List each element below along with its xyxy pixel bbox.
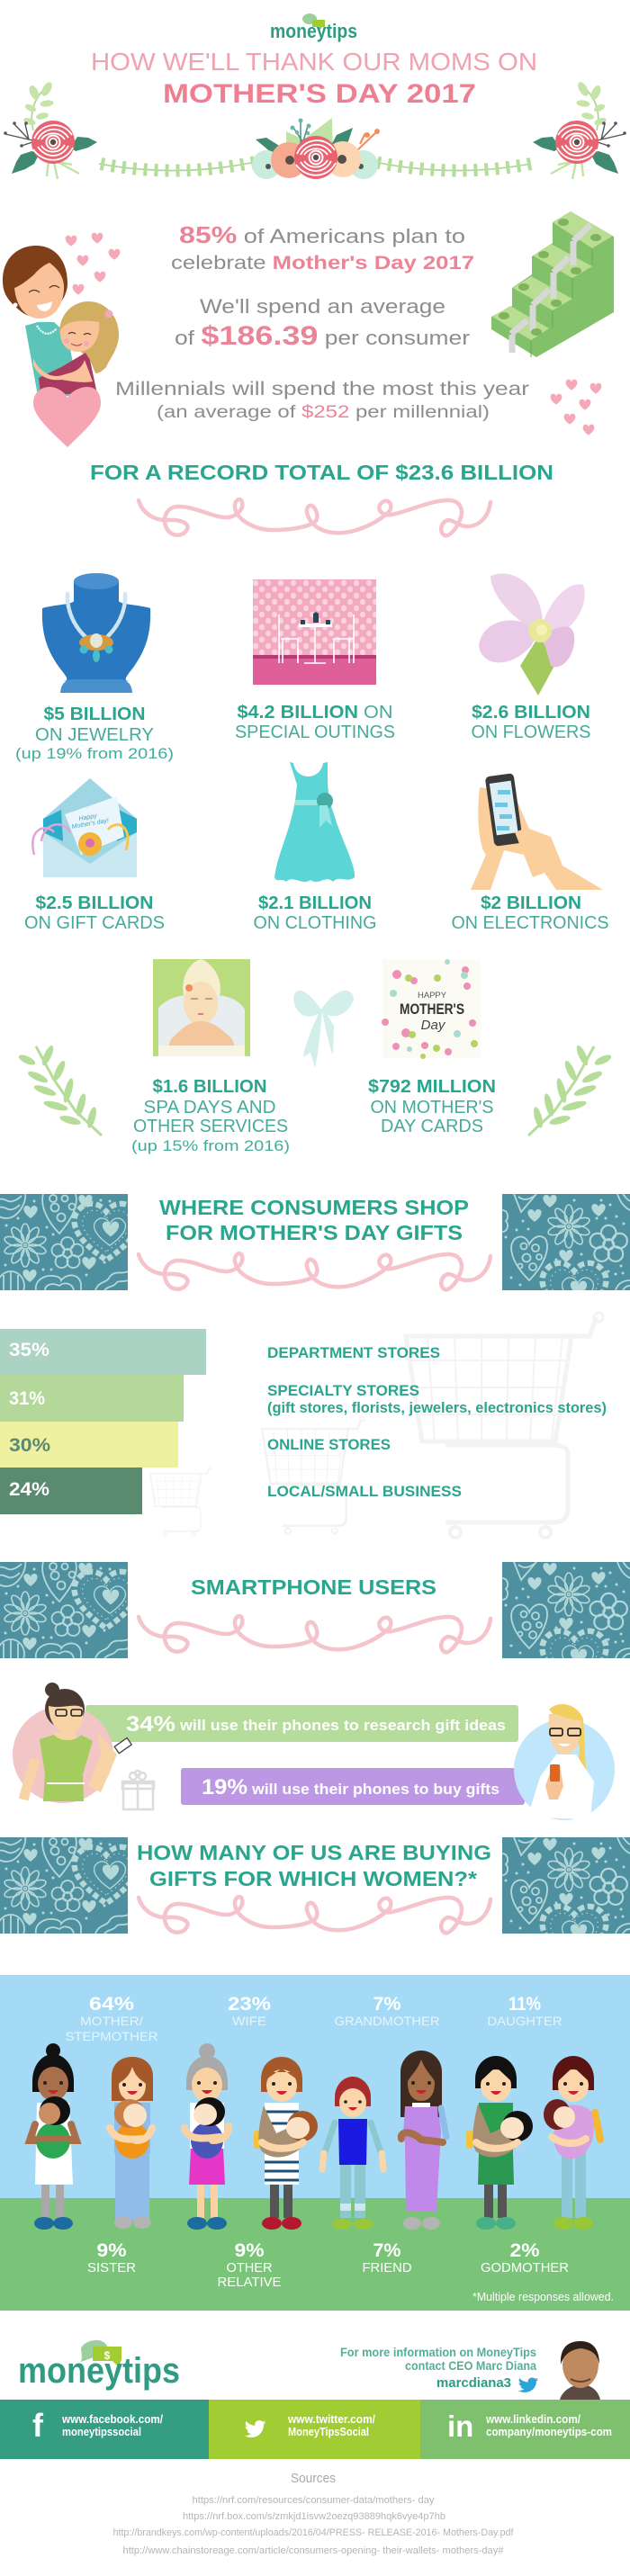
stats row bottom: 9% [234,2240,265,2261]
stats row top: 11% [508,1994,541,2015]
section banner: buying gifts for which women [0,1836,630,1960]
section banner: buying gifts for which women: GIFTS FOR WHICH WOMEN?* [149,1867,477,1890]
twitter link [245,2412,375,2438]
title: MOTHER'S DAY 2017 [163,79,476,109]
panel: spa days: SPA DAYS AND [144,1098,275,1117]
linkedin link: in [447,2410,473,2443]
facebook link: www.facebook.com/ [61,2412,163,2426]
panel: mother's day cards [368,959,496,1136]
panel: clothing [254,762,376,933]
floral corner: right [533,80,626,179]
bar chart: where consumers shop: 24% [9,1479,50,1500]
store labels: (gift stores, florists, jewelers, electronics stores) [267,1399,607,1416]
linkedin link [447,2410,612,2443]
section banner: where consumers shop [0,1192,630,1317]
sources: Sources [291,2471,336,2486]
section banner: where consumers shop: FOR MOTHER'S DAY GIFTS [166,1221,463,1244]
facebook link: moneytipssocial [62,2425,141,2438]
panel: electronics: ON ELECTRONICS [452,913,608,933]
stats row bottom: SISTER [87,2260,136,2275]
panel: jewelry: $5 BILLION [43,705,146,724]
stats text block: celebrate Mother's Day 2017 [171,253,474,274]
figure: friend in blue [322,2077,383,2230]
callout: 34% phones to research [86,1705,518,1742]
woman with phone: left [13,1683,131,1803]
stats row top: DAUGHTER [488,2014,562,2028]
logo: moneytips top: moneytips [270,20,357,42]
icon: gift [122,1771,154,1809]
store labels: SPECIALTY STORES [267,1382,419,1399]
bar chart: where consumers shop: 31% [9,1388,45,1409]
callout: 19% phones to buy [181,1768,525,1805]
panel: flowers: ON FLOWERS [472,723,590,742]
floral corner: left [4,80,97,179]
footnote: *Multiple responses allowed. [472,2291,614,2303]
panel: sky and grass [0,1975,630,2311]
heading: record total: FOR A RECORD TOTAL OF $23.6 BILLION [90,461,554,484]
section banner: buying gifts for which women: HOW MANY OF US ARE BUYING [137,1841,491,1864]
figure: mother with baby, white dress [30,2043,76,2230]
panel: gift cards: $2.5 BILLION [36,893,153,913]
panel: gift cards [24,778,165,933]
store labels [267,1344,607,1500]
panel: special outings: $4.2 BILLION ON [238,703,393,723]
panel: jewelry [15,573,174,762]
portrait: Marc Diana [560,2341,600,2400]
title: HOW WE'LL THANK OUR MOMS ON [91,48,537,76]
panel: spa days: OTHER SERVICES [133,1117,288,1136]
stats text block: We'll spend an average [200,295,446,318]
panel: gift cards: Mother's day! [71,818,110,830]
linkedin link: www.linkedin.com/ [485,2412,580,2426]
figure: grandmother with baby [184,2043,229,2230]
floral centerpiece with vine [99,118,531,179]
sources: https://nrf.box.com/s/zmkjd1isvw2oezq93889hqk6vye4p7hb [183,2511,446,2522]
logo: moneytips footer: $ [104,2349,111,2362]
stats text block: Millennials will spend the most this year [115,379,529,399]
facebook link [32,2407,163,2444]
callout: 19% phones to buy: 19% [202,1775,248,1800]
callout: 19% phones to buy: will use their phones to buy gifts [251,1781,500,1798]
panel: spa days: (up 15% from 2016) [131,1137,290,1154]
stats row top: 64% [89,1994,134,2015]
store labels: ONLINE STORES [267,1436,391,1453]
stats row top: MOTHER/ [80,2014,143,2028]
stats row bottom: 7% [373,2240,401,2261]
panel: clothing: ON CLOTHING [254,913,376,933]
panel: spa days: $1.6 BILLION [153,1077,266,1097]
panel: gift cards: Happy [78,812,98,822]
title [91,48,537,109]
stats row bottom: GODMOTHER [481,2260,569,2275]
hearts beside mother [66,233,120,295]
panel: electronics: $2 BILLION [481,893,581,913]
store labels: LOCAL/SMALL BUSINESS [267,1483,462,1500]
callout: 34% phones to research: 34% [126,1712,176,1737]
stats row bottom: 2% [509,2240,540,2261]
stats row top [65,1994,562,2043]
twitter link: MoneyTipsSocial [288,2425,369,2438]
logo: moneytips footer: moneytips [18,2351,180,2391]
panel: jewelry: ON JEWELRY [35,725,154,745]
figure: woman in purple dress [400,2051,446,2230]
sources: http://brandkeys.com/wp-content/uploads/2016/04/PRESS- RELEASE-2016- Mothers-Day.pdf [113,2527,514,2538]
stats row bottom: OTHER [227,2260,273,2275]
contact block: marcdiana3 [436,2375,511,2391]
figure: mother with baby, blue dress [110,2057,153,2229]
panel: special outings [235,579,395,742]
panel: flowers: $2.6 BILLION [472,703,590,723]
icon: bow [293,991,354,1068]
stats text block [115,221,529,422]
panel: electronics [452,773,608,933]
contact block: For more information on MoneyTips [340,2345,536,2359]
stats row top: WIFE [232,2014,266,2028]
stats row top: 7% [373,1994,401,2015]
linkedin link: company/moneytips-com [486,2425,612,2438]
panel: mother's day cards: MOTHER'S [400,1001,464,1018]
panel: jewelry: (up 19% from 2016) [15,745,174,762]
panel: spa days [131,959,290,1154]
figure: mother with yellow sleeves [544,2056,600,2230]
section banner: smartphone users [0,1560,630,1684]
hearts right [551,380,601,435]
panel: mother's day cards: ON MOTHER'S [371,1098,493,1117]
icon: right branch [528,1044,613,1135]
contact block [340,2345,538,2392]
woman with phone: right [514,1704,615,1820]
stats row top: GRANDMOTHER [335,2014,439,2028]
figure: mother with striped top [254,2057,318,2230]
stats row bottom [87,2240,569,2290]
swash divider [139,499,490,535]
stats text block: 85% of Americans plan to [179,221,465,248]
panel: mother's day cards: $792 MILLION [368,1077,496,1097]
section banner: where consumers shop: WHERE CONSUMERS SHOP [159,1196,469,1219]
stats row top: 23% [228,1994,271,2015]
panel: special outings: SPECIAL OUTINGS [235,723,395,742]
icon: money stack [491,211,614,357]
panel: flowers [472,573,590,742]
panel: gift cards: ON GIFT CARDS [24,913,165,933]
panel: mother's day cards: DAY CARDS [381,1117,483,1136]
icon: mother hugging daughter [3,246,119,447]
bar chart: where consumers shop: 30% [9,1435,50,1456]
stats row bottom: 9% [97,2240,127,2261]
stats row bottom: FRIEND [362,2260,412,2275]
callout: 34% phones to research: will use their phones to research gift ideas [179,1717,506,1734]
icon: left branch [17,1044,102,1135]
stats text block: (an average of $252 per millennial) [157,403,490,422]
stats row bottom: RELATIVE [218,2275,281,2290]
stats text block: of $186.39 per consumer [175,321,470,351]
sources: https://nrf.com/resources/consumer-data/mothers- day [193,2495,435,2506]
bar chart: where consumers shop: 35% [9,1340,50,1360]
panel: mother's day cards: Day [421,1018,446,1033]
panel: clothing: $2.1 BILLION [258,893,372,913]
twitter link: www.twitter.com/ [287,2412,375,2426]
sources: http://www.chainstoreage.com/article/consumers-opening- their-wallets- mothers-day# [122,2545,504,2556]
panel: mother's day cards: HAPPY [418,991,446,1000]
section banner: smartphone users: SMARTPHONE USERS [191,1575,436,1599]
social bar [0,2400,630,2459]
figure: mother with green skirt [466,2056,533,2230]
contact block: contact CEO Marc Diana [405,2358,536,2373]
shopping carts background [150,1313,603,1538]
stats row top: STEPMOTHER [65,2029,158,2043]
store labels: DEPARTMENT STORES [267,1344,440,1361]
bar chart: where consumers shop [0,1329,206,1514]
facebook link: f [32,2407,44,2444]
sources [113,2471,514,2556]
